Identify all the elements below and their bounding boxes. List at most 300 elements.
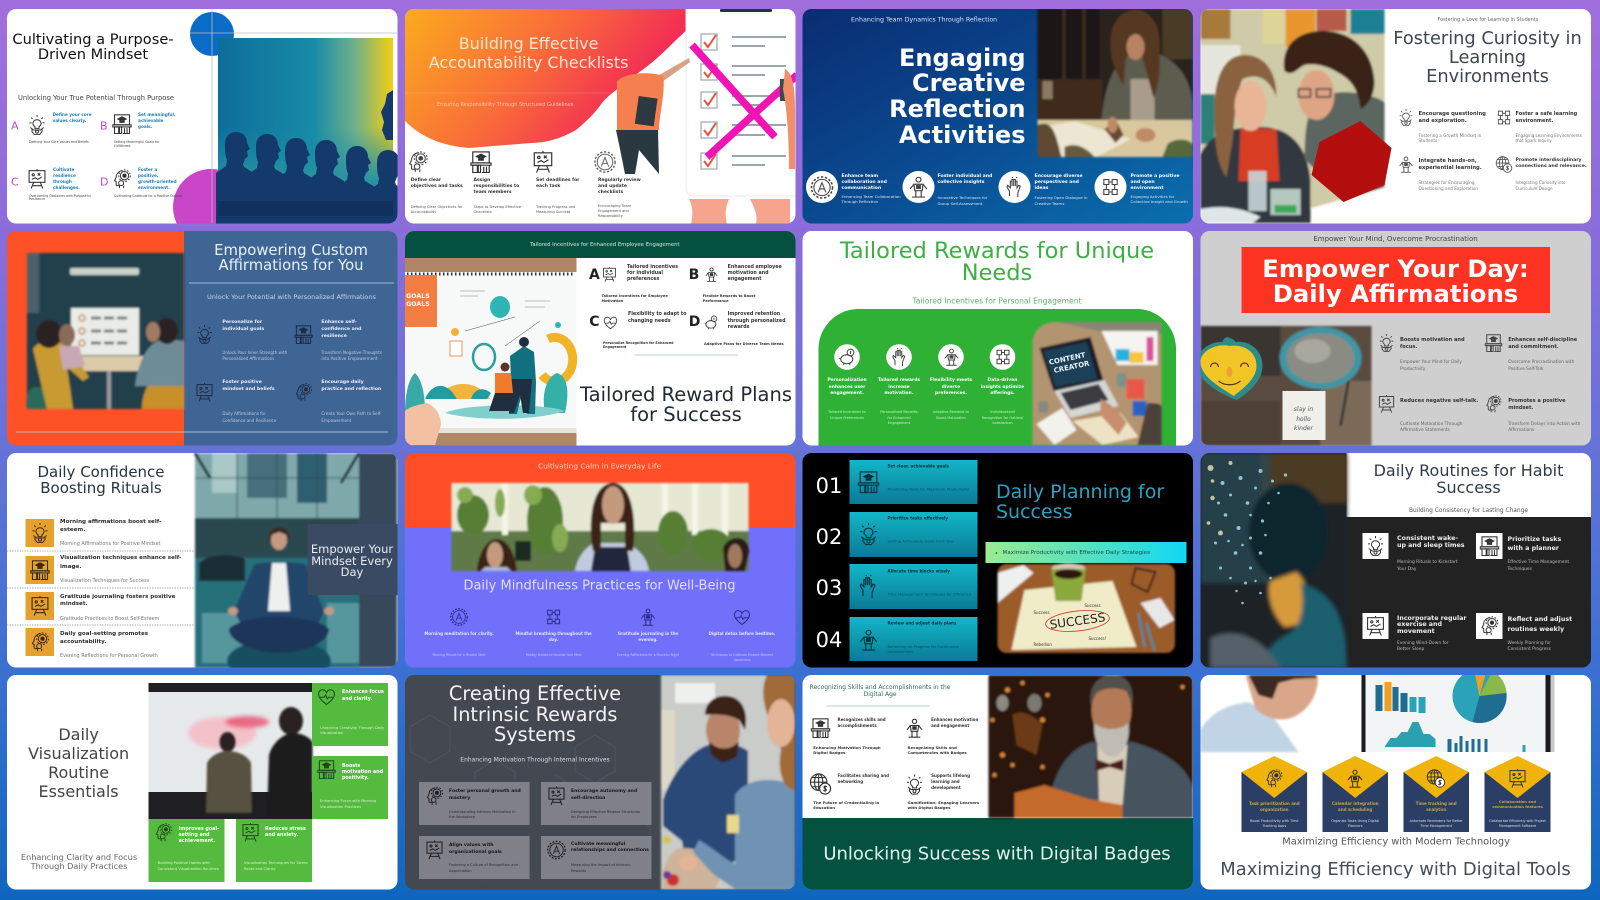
item: enhances: Enhances motivation xyxy=(931,716,978,722)
step 03: Time Management Techniques for Efficiency xyxy=(886,592,972,596)
panel: Empower Your Day Daily Affirmations xyxy=(1196,231,1591,446)
box: focus: Enhances focus xyxy=(342,688,384,694)
item: mindset: Daily Affirmations for xyxy=(222,410,266,416)
item B: motivation and xyxy=(728,270,769,276)
item: mindset xyxy=(197,378,277,422)
item: exercise xyxy=(1362,613,1467,652)
title: Essentials xyxy=(39,782,119,800)
card: collaboration: Collaboration and xyxy=(1499,800,1536,804)
item: goal setting: accountability. xyxy=(60,639,106,645)
card: collaboration: Collaborate Efficiently with Project xyxy=(1489,819,1547,823)
item: data-driven: insights optimize xyxy=(981,384,1024,390)
item: recognizes: Digital Badges xyxy=(813,750,846,754)
item: breathing: Mindful breathing throughout the xyxy=(515,630,592,636)
item: environment: and open xyxy=(1130,178,1155,184)
item: collaboration: communication xyxy=(842,184,881,190)
item: tailored rewards: Engagement xyxy=(888,421,911,425)
item: daily practice: Encourage daily xyxy=(321,378,364,384)
panel: Daily Confidence Boosting Rituals xyxy=(7,453,398,683)
item D: environment. xyxy=(138,184,170,190)
item A: values clearly. xyxy=(52,118,87,122)
item B: Flexible Rewards to Boost xyxy=(703,294,756,298)
item: deadlines: Set deadlines for xyxy=(536,176,580,182)
item: interdisciplinary: Promote interdisciplinary xyxy=(1516,156,1582,162)
item: self-talk: Affirmative Statements xyxy=(1400,426,1451,432)
item: sharing: Education xyxy=(813,804,835,810)
item: mindset: Affirmations xyxy=(1508,426,1535,432)
item: insights: Foster individual and xyxy=(938,172,992,178)
item C: Personalize Recognition for Enhanced xyxy=(603,341,674,345)
photo: success notebook on desk: Success xyxy=(1084,602,1101,608)
item C: changing needs xyxy=(628,318,671,324)
item: enhances: Recognizing Skills and xyxy=(908,744,957,750)
item: resilience: Enhance self- xyxy=(321,318,357,324)
item A: Define your core xyxy=(52,112,92,116)
item: review: Engagement and xyxy=(598,209,629,213)
card: collaboration: communication features xyxy=(1492,805,1544,809)
photo: two men viewing data wall xyxy=(148,683,312,819)
item: data-driven xyxy=(981,344,1024,425)
item: deadlines: Measuring Success xyxy=(536,210,570,214)
item: collaboration: Enhancing Team Collaboration xyxy=(842,194,901,198)
box: goal setting: Building Positive Habits with xyxy=(158,861,211,865)
item: tailored rewards: Personalized Benefits xyxy=(880,410,918,414)
item: questioning xyxy=(1400,109,1486,142)
item: review: Encouraging Team xyxy=(598,204,632,208)
item: hands-on: experiential learning. xyxy=(1418,165,1482,171)
item: lifelong: learning and xyxy=(931,778,960,784)
title: Fostering Curiosity in xyxy=(1393,28,1582,48)
item C xyxy=(589,310,687,349)
item: define xyxy=(410,152,463,214)
item A: Tailored Incentives for Employee xyxy=(602,294,668,298)
box: motivation: positivity. xyxy=(342,774,369,780)
item: lifelong: with Digital Badges xyxy=(908,804,951,810)
item D: D xyxy=(689,314,700,330)
item: gratitude: Gratitude journaling fosters positive xyxy=(60,594,176,600)
item B: Fulfillment xyxy=(114,144,131,148)
step 01: Prioritizing Tasks for Maximum Productivity xyxy=(888,486,970,492)
box: motivation: motivation and xyxy=(342,768,384,774)
card: time tracking xyxy=(1404,756,1469,832)
item: reflect: Reflect and adjust xyxy=(1508,616,1572,622)
item: review: Responsibility xyxy=(598,214,624,218)
item: daily practice xyxy=(296,378,382,422)
item D: rewards xyxy=(728,324,750,330)
box: stress: Visualization Techniques for Stress xyxy=(244,861,308,865)
item: insights: collective insights xyxy=(938,178,985,184)
title: Affirmations for You xyxy=(218,256,364,274)
subtitle: Digital Age xyxy=(864,690,897,698)
item: collaboration: Through Reflection xyxy=(840,198,879,204)
header text: Tailored Incentives for Enhanced Employee Engagement xyxy=(529,242,680,248)
box: growth: mastery xyxy=(449,794,470,800)
item: perspectives: ideas xyxy=(1034,184,1049,190)
item: environment: Promote a positive xyxy=(1130,172,1179,178)
item: assign: Checklists xyxy=(474,210,492,214)
item B: Performance xyxy=(703,299,729,303)
item: define: Accountability xyxy=(411,210,437,214)
card: collaboration xyxy=(1484,756,1550,832)
card: task prioritization: Tracking Apps xyxy=(1262,824,1286,828)
item A xyxy=(589,264,678,303)
item: insights: Innovative Techniques for xyxy=(938,194,988,200)
item: reflect: Weekly Planning for xyxy=(1508,640,1551,646)
title: Daily xyxy=(58,724,99,744)
panel: Fostering Curiosity in Learning Environments xyxy=(1200,9,1591,224)
item: deadlines: Tracking Progress and xyxy=(535,205,575,209)
item: perspectives: Creative Teams xyxy=(1034,200,1064,206)
photo: students collaborating xyxy=(661,675,795,890)
item A: preferences xyxy=(627,276,660,282)
item C: Flexibility to adapt to xyxy=(628,310,687,316)
item: planner: Effective Time Management xyxy=(1508,558,1569,564)
item: journaling xyxy=(617,609,680,657)
item: assign: responsibilities to xyxy=(474,182,519,188)
item: tailored rewards: increase xyxy=(888,384,910,390)
title: Empower Your Day: xyxy=(1262,254,1529,282)
item: tailored rewards xyxy=(878,344,920,425)
item: motivation: Empower Your Mind for Daily xyxy=(1400,358,1462,364)
card: collaboration: Management Software xyxy=(1499,824,1536,828)
subtitle: Enhancing Clarity and Focus xyxy=(21,852,137,862)
item: detox: Awareness xyxy=(734,658,751,662)
photo: person dissolving into light particles xyxy=(1200,453,1348,668)
item: data-driven: Recognition for Optimal xyxy=(982,416,1023,420)
photo: success notebook on desk: Success! xyxy=(1088,636,1106,640)
item: environment: environment xyxy=(1130,184,1164,190)
item: flexibility: Flexibility meets xyxy=(930,376,972,382)
box: values: Appreciation xyxy=(449,869,472,873)
item: wake-up: Consistent wake- xyxy=(1397,534,1458,542)
title: Routine xyxy=(48,762,109,782)
item: personalization: Tailored Incentives to xyxy=(827,410,866,414)
item: flexibility xyxy=(930,344,972,420)
item C: Overcoming Obstacles with Purposeful xyxy=(29,194,91,198)
item: data-driven: Satisfaction xyxy=(992,421,1013,425)
box: goal setting xyxy=(148,819,224,882)
item: detox: Techniques to Cultivate Present-Moment xyxy=(710,653,774,657)
step 02: 02 xyxy=(816,525,842,549)
title: Tailored Reward Plans xyxy=(579,382,792,406)
title: Boosting Rituals xyxy=(40,479,162,497)
subtitle: Tailored Incentives for Personal Engagement xyxy=(911,296,1082,306)
item C: Resilience xyxy=(29,197,45,201)
title: Visualization xyxy=(28,744,129,762)
item: self-talk xyxy=(1379,395,1478,432)
banner: Maximize Productivity with Effective Daily Strategies xyxy=(1002,550,1150,556)
item: planner: Techniques xyxy=(1506,566,1533,572)
box: focus: Unlocking Creativity Through Daily xyxy=(320,726,385,730)
item D: Cultivating Gratitude for a Positive Outlook xyxy=(114,194,183,198)
title: Daily Confidence xyxy=(37,463,165,481)
photo: success notebook on desk: SUCCESS xyxy=(1049,610,1106,632)
item: motivation: Productivity xyxy=(1400,366,1426,372)
item B: B xyxy=(100,120,108,132)
item: questioning: Encourage questioning xyxy=(1418,111,1486,117)
subtitle: Empower Your Mind, Overcome Procrastination xyxy=(1313,235,1478,243)
box: goal setting: Consistent Visualization Routines xyxy=(158,867,219,871)
box: relationships: Rewards xyxy=(571,869,586,873)
box: autonomy: for Employees xyxy=(571,815,597,819)
title: Daily Affirmations xyxy=(1273,278,1518,308)
box: relationships: relationships and connections xyxy=(571,846,649,852)
item: self-discipline: Positive Self-Talk xyxy=(1508,366,1544,372)
item: questioning: and exploration. xyxy=(1418,118,1467,124)
item B: achievable xyxy=(138,118,164,122)
item: flexibility: Adaptive Rewards to xyxy=(933,410,969,414)
item: safe environment: that Spark Inquiry xyxy=(1516,138,1552,142)
gradient blob xyxy=(405,9,709,148)
subtitle: Unlock Your Potential with Personalized Affirmations xyxy=(207,293,376,301)
item B: goals. xyxy=(138,124,153,128)
item: recognizes: Recognizes skills and xyxy=(838,716,886,722)
photo: smiling heart and mirror: hollo xyxy=(1296,416,1311,422)
card: time tracking: Automate Reminders for Better xyxy=(1410,819,1463,823)
box: autonomy: Designing Effective Reward Structures xyxy=(571,810,640,814)
box: focus xyxy=(312,683,388,746)
item: motivation xyxy=(1380,334,1465,372)
photo: team meeting xyxy=(26,253,184,409)
item: assign xyxy=(471,152,522,214)
title: Maximizing Efficiency with Digital Tools xyxy=(1220,859,1571,880)
item: safe environment: Foster a safe learning xyxy=(1516,111,1578,117)
item: personalization xyxy=(827,344,867,420)
card: task prioritization: Task prioritization and xyxy=(1249,800,1300,806)
title: Daily Planning for xyxy=(996,481,1164,503)
title: Engaging xyxy=(899,44,1026,72)
item: review xyxy=(595,152,641,218)
item: define: Defining Clear Objectives for xyxy=(411,205,463,209)
item: safe environment xyxy=(1498,111,1582,142)
title: Environments xyxy=(1426,66,1549,86)
item D xyxy=(100,166,183,198)
item: recognizes: accomplishments xyxy=(838,722,877,728)
item: goal setting: Daily goal-setting promotes xyxy=(60,631,149,637)
item: planner xyxy=(1476,533,1569,572)
title: Learning xyxy=(1449,46,1526,68)
subtitle: Building Consistency for Lasting Change xyxy=(1409,508,1528,514)
bottom band xyxy=(802,818,1193,890)
card: time tracking: analytics xyxy=(1426,806,1447,812)
item: perspectives: perspectives and xyxy=(1034,178,1079,184)
decorative blue circle xyxy=(190,12,234,56)
item: personalization: Unique Preferences xyxy=(830,416,864,420)
item C: Cultivate xyxy=(53,166,74,172)
red hexagon xyxy=(1312,121,1392,202)
subtitle: Maximizing Efficiency with Modern Technology xyxy=(1282,836,1510,848)
step 01 xyxy=(816,460,978,504)
card: calendar integration: Planners xyxy=(1348,824,1363,828)
step 03: 03 xyxy=(816,576,842,600)
item: gratitude: mindset. xyxy=(60,601,88,607)
item: personalization: enhances user xyxy=(829,384,866,390)
title: Activities xyxy=(899,121,1026,149)
item: motivation: Boosts motivation and xyxy=(1400,337,1465,343)
title: Reflection xyxy=(889,95,1026,123)
item: mindset xyxy=(1487,396,1581,432)
item: goals: Unlock Your Inner Strength with xyxy=(222,350,288,354)
card: task prioritization: organization xyxy=(1260,806,1289,812)
card: time tracking: Time tracking and xyxy=(1416,800,1457,806)
card: time tracking: Time Management xyxy=(1419,824,1453,828)
item B xyxy=(689,264,783,303)
panel: Engaging Creative Reflection Activities xyxy=(802,9,1193,224)
item: hands-on xyxy=(1400,157,1482,190)
box: focus: and clarity. xyxy=(342,696,372,702)
subtitle: Ensuring Responsibility Through Structured Guidelines xyxy=(437,102,574,108)
item: define: Define clear xyxy=(411,176,442,182)
subtitle: Cultivating Calm in Everyday Life xyxy=(538,462,661,470)
card: task prioritization: Boost Productivity with Time xyxy=(1250,819,1299,823)
item: data-driven: offerings. xyxy=(990,390,1015,396)
step 04: Review and adjust daily plans xyxy=(888,620,957,626)
item: self-discipline: and commitment. xyxy=(1508,344,1559,350)
item: breathing xyxy=(515,610,592,657)
item: reflect: routines weekly xyxy=(1508,626,1564,632)
box: growth xyxy=(419,782,530,825)
step 04: Improvement xyxy=(888,648,914,654)
item: self-discipline xyxy=(1485,335,1578,372)
item: journaling: Gratitude journaling in the xyxy=(618,630,678,636)
item: hands-on: Questioning and Exploration xyxy=(1418,186,1478,190)
illustration: notebook with goals artwork xyxy=(405,258,576,446)
item: sharing: The Future of Credentialing in xyxy=(813,800,880,804)
item: meditation: Morning meditation for clarity. xyxy=(424,630,494,636)
panel: Daily Planning for Success xyxy=(802,453,1193,668)
callout box: Mindset Every xyxy=(311,554,393,568)
item: interdisciplinary xyxy=(1496,156,1587,190)
panel: Creating Effective Intrinsic Rewards Systems xyxy=(405,675,796,890)
item: gratitude: Gratitude Practices to Boost Self-Esteem xyxy=(60,616,159,622)
item B: Setting Meaningful Goals for xyxy=(114,140,160,144)
item: enhances: and engagement xyxy=(931,722,969,728)
panel: Unlocking Success with Digital Badges xyxy=(802,675,1193,890)
item: exercise: exercise and xyxy=(1397,620,1442,628)
item: review: checklists xyxy=(598,188,623,194)
item: resilience: Transform Negative Thoughts xyxy=(320,350,382,354)
box: autonomy xyxy=(541,782,652,825)
step 01: Set clear, achievable goals xyxy=(888,464,950,468)
title: Cultivating a Purpose- xyxy=(12,30,174,48)
pie chart xyxy=(1452,669,1507,723)
item: daily practice: Empowerment xyxy=(321,418,352,422)
panel: Daily Visualization Routine Essentials xyxy=(7,675,398,890)
item D: D xyxy=(100,176,108,188)
item: recognizes xyxy=(811,716,886,754)
panel: Daily Mindfulness Practices for Well-Being xyxy=(405,453,796,668)
item A: Tailored incentives xyxy=(627,264,678,270)
box: values: Fostering a Culture of Recognition and xyxy=(449,863,518,867)
item D: through personalized xyxy=(728,318,786,324)
item: detox xyxy=(709,611,776,662)
item B: engagement xyxy=(728,276,762,282)
step 03: Allocate time blocks wisely xyxy=(888,568,950,574)
item: reflect xyxy=(1476,613,1572,652)
box: relationships xyxy=(541,836,652,879)
caption on photo: CREATOR xyxy=(1053,359,1091,375)
item: self-discipline: Overcome Procrastination with xyxy=(1508,358,1575,364)
box: motivation: Enhancing Focus with Morning xyxy=(320,799,376,803)
item: data-driven: Individualized xyxy=(990,410,1015,414)
item: journaling: Evening Reflections for a Peaceful Night xyxy=(617,653,680,657)
item: meditation: Morning Rituals for a Mindful Start xyxy=(432,653,486,657)
title: Tailored Rewards for Unique xyxy=(839,238,1154,264)
item A: Defining Your Core Values and Beliefs xyxy=(29,140,89,144)
item: data-driven: Data-driven xyxy=(988,376,1018,382)
item: goals: Personalize for xyxy=(222,318,263,324)
item: visualization: image. xyxy=(60,564,81,570)
item: lifelong: Gamification: Engaging Learners xyxy=(908,800,980,804)
item D: Foster a xyxy=(138,166,157,172)
item: enhances xyxy=(907,716,978,754)
item: mindset: Confidence and Resilience xyxy=(222,418,277,422)
item: exercise: Better Sleep xyxy=(1397,646,1424,652)
item: lifelong xyxy=(907,772,980,810)
item: recognizes: Enhancing Motivation Through xyxy=(813,744,881,750)
item: resilience: resilience xyxy=(321,332,347,338)
item: gratitude xyxy=(26,592,176,622)
caption on photo: CONTENT xyxy=(1048,351,1086,367)
item: wake-up: Morning Rituals to Kickstart xyxy=(1397,558,1458,564)
subtitle: Fostering a Love for Learning in Students xyxy=(1438,17,1539,23)
box: motivation xyxy=(312,756,388,819)
item A: A xyxy=(589,267,600,283)
item: questioning: Students xyxy=(1418,138,1437,142)
item B: B xyxy=(689,267,699,283)
item: environment xyxy=(1094,171,1188,204)
item: mindset: Transform Delays into Action with xyxy=(1507,420,1581,426)
title: Building Effective xyxy=(459,34,598,52)
item B: Set meaningful, xyxy=(138,112,176,116)
red title banner xyxy=(1242,247,1550,313)
item: collaboration xyxy=(806,171,901,204)
item: hands-on: Integrate hands-on, xyxy=(1418,158,1477,164)
illustration: notebook with goals artwork: GOALS xyxy=(406,300,430,308)
item: morning affirmations xyxy=(26,519,162,547)
item: breathing: Midday Breaks to Nourish Your Mind xyxy=(526,653,581,657)
item: insights: Group Self-Assessment xyxy=(938,200,983,206)
item: exercise: Evening Wind-Down for xyxy=(1397,640,1449,646)
item: self-discipline: Enhances self-discipline xyxy=(1508,337,1578,343)
item: wake-up: Your Day xyxy=(1396,566,1417,572)
banner xyxy=(986,542,1186,563)
photo: success notebook on desk xyxy=(998,563,1175,653)
step 03 xyxy=(816,564,978,609)
item: morning affirmations: esteem. xyxy=(60,527,85,533)
item: assign: team members xyxy=(474,188,512,194)
item: self-talk: Reduces negative self-talk. xyxy=(1400,398,1478,404)
box: autonomy: self-direction xyxy=(571,794,605,800)
item: detox: Digital detox before bedtime. xyxy=(709,630,776,636)
panel: Cultivating a Purpose-Driven Mindset xyxy=(7,9,398,224)
title: Unlocking Success with Digital Badges xyxy=(823,844,1171,864)
item A xyxy=(11,112,92,144)
panel: Daily Routines for Habit Success xyxy=(1200,453,1592,668)
title: for Success xyxy=(630,402,742,426)
item: meditation xyxy=(424,609,494,657)
item: goal setting: Evening Reflections for Personal Growth xyxy=(60,653,158,659)
title: Empowering Custom xyxy=(214,242,368,258)
subtitle: Through Daily Practices xyxy=(30,861,127,871)
box: goal setting: Improves goal- xyxy=(179,826,219,832)
box: stress: Reduces stress xyxy=(265,826,306,832)
item A: A xyxy=(11,120,19,132)
box: motivation: Boosts xyxy=(342,762,360,768)
step 02: Prioritize tasks effectively xyxy=(888,516,948,520)
box: focus: Visualization xyxy=(320,731,344,735)
item: flexibility: Boost Motivation xyxy=(936,416,966,420)
